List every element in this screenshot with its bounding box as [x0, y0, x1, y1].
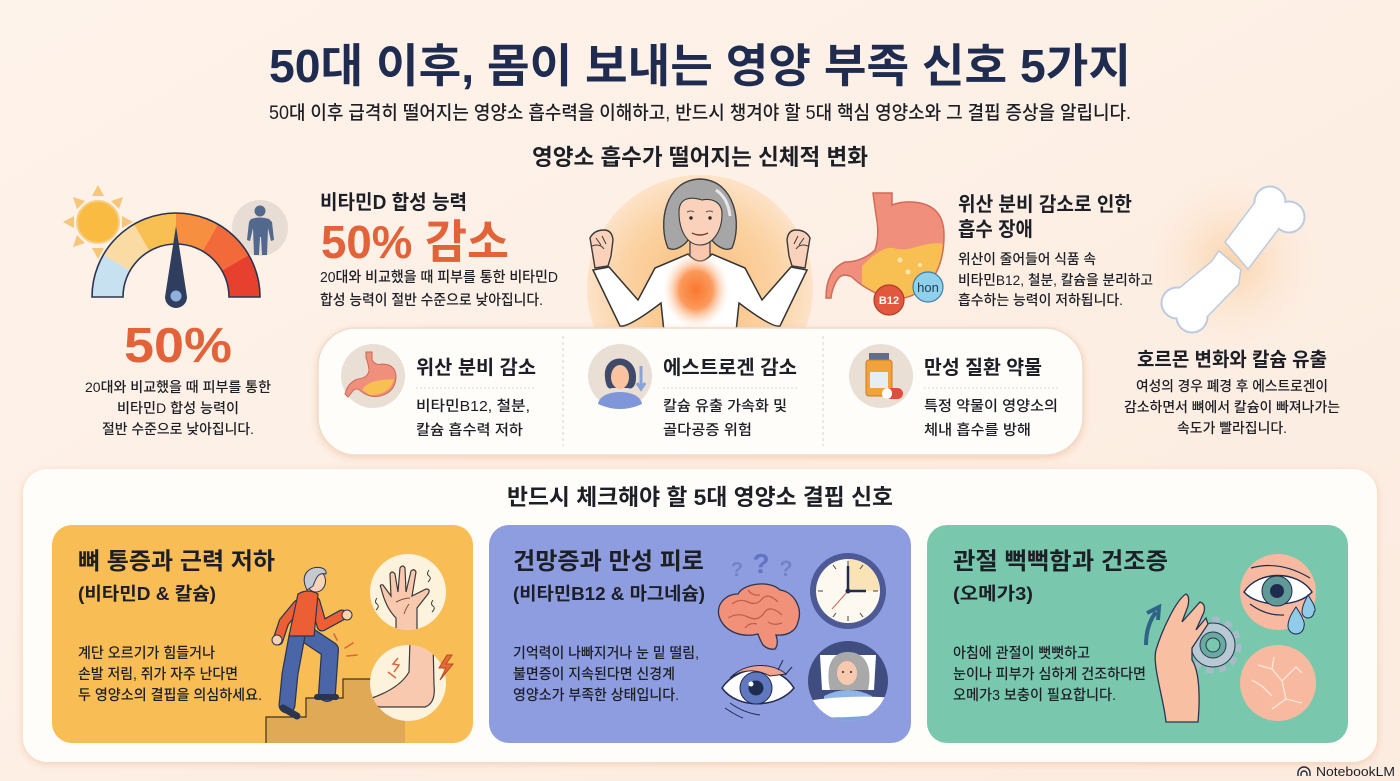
card: bone pain: 두 영양소의 결핍을 의심하세요. [78, 687, 262, 704]
icon: person in circle [232, 200, 288, 256]
icon: dry eye [1240, 554, 1316, 634]
subtitle: 50대 이후 급격히 떨어지는 영양소 흡수력을 이해하고, 반드시 챙겨야 할 5대 핵심 영양소와 그 결핍 증상을 알립니다. [269, 102, 1131, 124]
gauge chart [92, 213, 260, 297]
illustration: stomach with nutrients: B12 [879, 295, 899, 307]
text block: hormones: 감소하면서 뼈에서 칼슘이 빠져나가는 [1124, 399, 1340, 415]
cause: medication: 체내 흡수를 방해 [924, 422, 1031, 439]
card: bone pain [52, 525, 473, 743]
cause: medication: 특정 약물이 영양소의 [924, 398, 1058, 415]
text block: vitamin D: 50% 감소 [321, 216, 509, 268]
cause: gastric acid: 위산 분비 감소 [416, 357, 536, 379]
shirt and arms [593, 254, 807, 332]
cause: medication [849, 344, 1058, 439]
big stat: 50%: 50% [124, 319, 232, 373]
card: brain fog [489, 525, 911, 743]
cause: gastric acid: 칼슘 흡수력 저하 [416, 422, 523, 439]
illustration: stomach with nutrients [826, 193, 946, 315]
text block: stomach acid: 위산 분비 감소로 인한 [958, 193, 1132, 216]
illustration: stomach with nutrients: hon [917, 280, 939, 295]
icon: brain [718, 584, 799, 649]
cause: estrogen: 칼슘 유출 가속화 및 [663, 398, 787, 415]
card: brain fog: (비타민B12 & 마그네슘) [513, 584, 705, 604]
text block: stomach acid: 흡수하는 능력이 저하됩니다. [958, 292, 1123, 308]
hair [664, 179, 736, 249]
text block: stomach acid: 위산이 줄어들어 식품 속 [958, 251, 1096, 267]
illustration: broken bone [1140, 170, 1324, 354]
icon: question marks [731, 548, 793, 581]
cause: estrogen [588, 344, 797, 439]
icon: eye [722, 660, 794, 718]
card: joint stiffness: 아침에 관절이 뻣뻣하고 [953, 645, 1090, 662]
card: bone pain: (비타민D & 칼슘) [78, 584, 216, 604]
card: brain fog: 기억력이 나빠지거나 눈 밑 떨림, [513, 645, 699, 662]
card: joint stiffness: 관절 뻑뻑함과 건조증 [953, 548, 1168, 574]
icon: question marks: ? [752, 548, 770, 579]
text block: vitamin D [320, 191, 558, 309]
text block: vitamin D: 20대와 비교했을 때 피부를 통한 비타민D [320, 269, 558, 286]
text block: stomach acid: 비타민B12, 철분, 칼슘을 분리하고 [958, 272, 1153, 288]
gauge caption [85, 379, 271, 437]
text block: vitamin D: 비타민D 합성 능력 [320, 191, 467, 214]
cause: gastric acid [341, 344, 536, 439]
gauge needle [165, 226, 187, 308]
card: bone pain: 뼈 통증과 근력 저하 [78, 548, 275, 574]
panel: three causes [318, 328, 1083, 455]
card: brain fog: 건망증과 만성 피로 [513, 548, 704, 574]
card: brain fog: 영양소가 부족한 상태입니다. [513, 687, 679, 704]
face [679, 198, 722, 245]
panel: five nutrient signals [23, 469, 1377, 762]
cause: medication: 만성 질환 약물 [924, 357, 1042, 379]
card: joint stiffness: (오메가3) [953, 584, 1033, 604]
fists [590, 230, 613, 268]
logo: NotebookLM: NotebookLM [1316, 764, 1395, 779]
text block: vitamin D: 합성 능력이 절반 수준으로 낮아집니다. [320, 292, 543, 309]
icon: clock [810, 553, 886, 629]
neck [690, 238, 710, 263]
text block: hormones: 속도가 빨라집니다. [1177, 420, 1287, 436]
section heading: physical changes: 영양소 흡수가 떨어지는 신체적 변화 [532, 145, 868, 170]
text block: hormones: 여성의 경우 폐경 후 에스트로겐이 [1136, 378, 1328, 394]
icon: question marks: ? [731, 559, 743, 581]
text block: stomach acid: 흡수 장애 [958, 218, 1033, 241]
illustration: woman with glowing chest [587, 175, 813, 401]
text block: stomach acid [958, 193, 1153, 308]
icon: dry skin [1240, 645, 1316, 721]
icon: hand tingling [370, 554, 446, 635]
card: bone pain: 계단 오르기가 힘들거나 [78, 645, 215, 662]
icon: sun [63, 185, 133, 259]
icon: question marks: ? [779, 556, 793, 581]
title: 50대 이후, 몸이 보내는 영양 부족 신호 5가지 [269, 40, 1131, 92]
gauge caption: 절반 수준으로 낮아집니다. [102, 421, 254, 437]
card: brain fog: 불면증이 지속된다면 신경계 [513, 666, 675, 683]
icon: gear [1188, 620, 1238, 670]
cause: estrogen: 골다공증 위험 [663, 422, 752, 439]
icon: foot pain [370, 640, 453, 721]
icon: hand holding gear [1155, 594, 1208, 722]
text block: hormones: 호르몬 변화와 칼슘 유출 [1137, 349, 1327, 371]
card: bone pain: 손발 저림, 쥐가 자주 난다면 [78, 666, 238, 683]
card: joint stiffness: 눈이나 피부가 심하게 건조하다면 [953, 666, 1146, 683]
illustration: stairs [266, 679, 405, 743]
text block: hormones [1124, 349, 1340, 436]
icon: arrow [1146, 607, 1159, 645]
card: joint stiffness [927, 525, 1348, 743]
cause: estrogen: 에스트로겐 감소 [663, 357, 797, 379]
gauge caption: 비타민D 합성 능력이 [117, 400, 239, 416]
cause: gastric acid: 비타민B12, 철분, [416, 398, 530, 415]
card: joint stiffness: 오메가3 보충이 필요합니다. [953, 687, 1116, 704]
illustration: climbing man [272, 567, 357, 716]
section heading: nutrient signals: 반드시 체크해야 할 5대 영양소 결핍 신호 [507, 485, 893, 510]
gauge caption: 20대와 비교했을 때 피부를 통한 [85, 379, 271, 395]
icon: sleepless woman [808, 641, 888, 721]
